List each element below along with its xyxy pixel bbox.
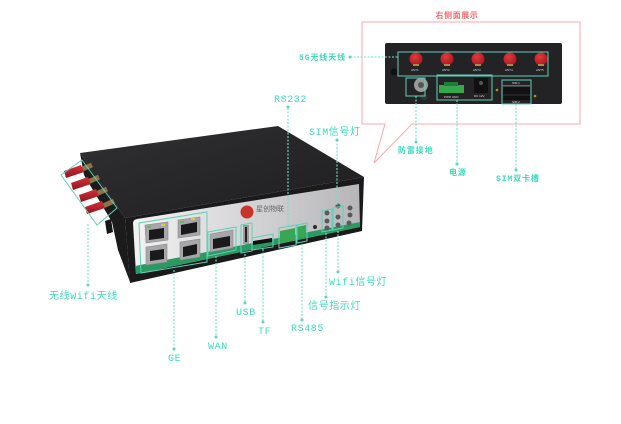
icon: SIM slots: [496, 80, 536, 104]
device body: [80, 126, 364, 283]
icon: RS232 and RS485 terminals: [279, 223, 307, 248]
side port: [105, 219, 113, 234]
top cover: [80, 126, 364, 218]
label: RS485: RS485: [291, 324, 324, 335]
label: signal indicator: 信号指示灯: [308, 299, 361, 313]
icon: indicator LEDs: [324, 204, 352, 230]
icon: SIM slots: SIM 2: [512, 100, 520, 104]
label: surge grounding: 防雷接地: [398, 145, 434, 156]
leader lines: [86, 56, 518, 350]
icon: SIM slots: SIM 1: [512, 81, 520, 85]
icon: reset button: [313, 225, 317, 229]
logo: [240, 204, 284, 218]
logo: 星创物联: [256, 204, 284, 213]
icon: power connector: PWR GND: [444, 95, 459, 99]
icon: TF slot: [252, 234, 273, 250]
icon: wireless antenna highlight box: [61, 160, 117, 225]
icon: WAN RJ45 port: [208, 227, 236, 256]
icon: 5G antenna connectors: ANT3: [473, 68, 481, 72]
label: SIM signal light: SIM信号灯: [309, 126, 361, 139]
callout: right side panel outline: [362, 22, 580, 163]
icon: GE RJ45 ports: [139, 212, 207, 273]
panel: right side device view: [385, 43, 562, 104]
silver face plate: [133, 184, 360, 274]
icon: ground screw: [390, 68, 428, 100]
icon: power connector: DC 12V: [474, 94, 485, 98]
label: TF: TF: [258, 327, 271, 338]
icon: 5G antenna connectors: ANT5: [536, 68, 544, 72]
label: GE: GE: [168, 354, 181, 365]
icon: 5G antenna connectors: ANT1: [411, 68, 419, 72]
icon: 5G antenna connectors: [410, 52, 548, 72]
label: RS232: RS232: [274, 95, 307, 106]
icon: antenna highlight box: [398, 52, 548, 76]
green label strip: [135, 222, 360, 274]
label: power: 电源: [449, 167, 467, 178]
label: wifi signal light: Wifi信号灯: [329, 276, 387, 289]
label: USB: USB: [236, 308, 256, 319]
front bezel: [125, 177, 364, 283]
title: right side view: 右侧面展示: [436, 10, 478, 20]
label: dual SIM slot: SIM双卡槽: [496, 173, 540, 184]
label: WAN: WAN: [208, 342, 228, 353]
icon: USB port: [241, 223, 252, 253]
label: 5G antenna: 5G无线天线: [299, 52, 346, 63]
side face: [80, 153, 130, 282]
icon: 5G antenna connectors: ANT4: [505, 68, 513, 72]
icon: 5G antenna connectors: ANT2: [442, 68, 450, 72]
icon: power connector: [437, 75, 492, 100]
antennas on the left side: [64, 165, 114, 214]
label: wireless wifi antenna: 无线Wifi天线: [49, 289, 118, 303]
